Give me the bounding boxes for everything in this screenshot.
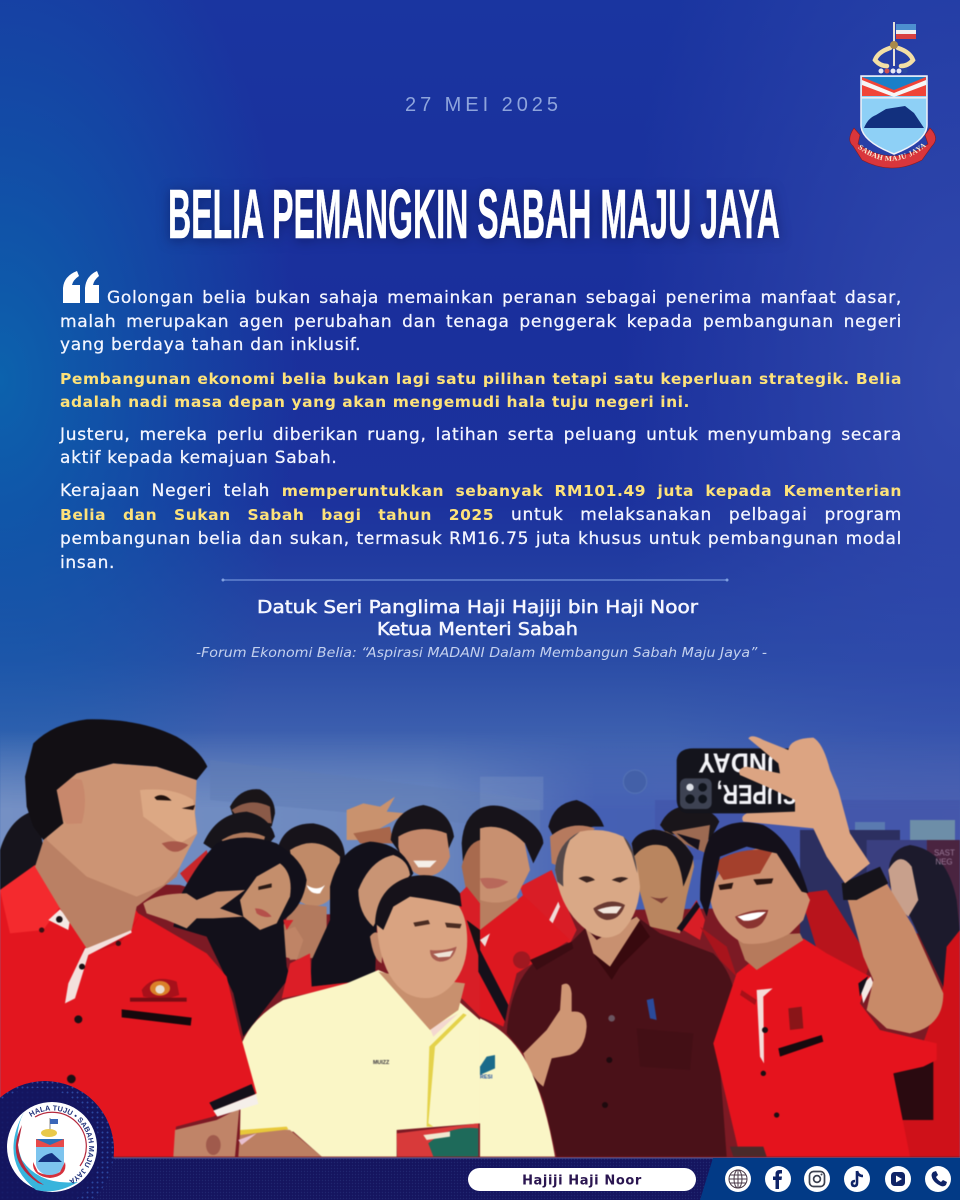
- thumb up hand: [523, 984, 587, 1087]
- book: [397, 1123, 478, 1157]
- selfie boy hair: [700, 822, 808, 917]
- arm: [173, 1108, 239, 1157]
- icon: facebook: [765, 1166, 791, 1192]
- crest on shirt: [142, 979, 179, 1000]
- back boy 1: [230, 789, 275, 827]
- old man face: [585, 917, 640, 967]
- icon: instagram: [804, 1166, 830, 1192]
- group photo: SUPER,: [717, 779, 797, 810]
- paragraph 2 highlighted: [60, 370, 902, 411]
- motto: SABAH MAJU JAYA: [858, 144, 926, 162]
- far left dark figure: [0, 810, 47, 890]
- selfie boy shirt: [713, 938, 937, 1157]
- paragraph 1: Golongan belia bukan sahaja memainkan peranan sebagai penerima manfaat dasar,: [107, 288, 902, 308]
- flag: [894, 22, 916, 66]
- event attribution: -Forum Ekonomi Belia: “Aspirasi MADANI Dalam Membangun Sabah Maju Jaya” -: [196, 646, 767, 661]
- badge crest: [33, 1118, 65, 1178]
- paragraph 2 highlighted: adalah nadi masa depan yang akan mengemudi hala tuju negeri ini.: [60, 393, 690, 411]
- footer bar: [0, 1158, 960, 1200]
- right edge boy: [462, 808, 480, 867]
- yellow shirt man: [240, 970, 480, 1157]
- group photo: NEG: [935, 858, 953, 867]
- speaker role: Ketua Menteri Sabah: [377, 620, 578, 640]
- back right sign and hijab: [927, 840, 960, 937]
- speaker name: Datuk Seri Panglima Haji Hajiji bin Haji Noor: [257, 598, 699, 618]
- back boy 2: [391, 805, 454, 853]
- strap: [467, 920, 480, 960]
- name pill: Hajiji Haji Noor: [522, 1174, 642, 1188]
- group photo: SUNDAY: [698, 747, 802, 778]
- paragraph 1: [60, 288, 902, 355]
- icon: quotation mark: [63, 271, 99, 303]
- name pill: [468, 1168, 696, 1191]
- group photo: MUIZZ: [373, 1060, 390, 1066]
- yellow shirt right part: [480, 1018, 555, 1157]
- badge ring text: HALA TUJU • SABAH MAJU JAYA: [28, 1105, 94, 1184]
- group photo: SAST: [934, 848, 955, 857]
- far right red: [897, 930, 960, 1157]
- paragraph 4: pembangunan belia dan sukan, termasuk RM16.75 juta khusus untuk pembangunan modal: [60, 529, 902, 549]
- red shirts behind: [282, 953, 370, 998]
- placket white: [65, 928, 132, 1003]
- fan on wall: [623, 770, 647, 793]
- icon: tiktok: [844, 1166, 870, 1192]
- red shirt boy left: [480, 895, 570, 1027]
- selfie boy arm: [845, 883, 943, 1033]
- paragraph 4: Belia dan Sukan Sabah bagi tahun 2025 untuk melaksanakan pelbagai program: [60, 505, 902, 525]
- back people left: [548, 800, 604, 837]
- black hijab girl: [173, 837, 307, 1037]
- cuff: [209, 1084, 255, 1111]
- date: 27 MEI 2025: [405, 94, 558, 116]
- paragraph 3: Justeru, mereka perlu diberikan ruang, latihan serta peluang untuk menyumbang secara: [60, 425, 902, 445]
- state crest logo: [849, 22, 936, 168]
- paragraph 1: yang berdaya tahan dan inklusif.: [60, 335, 361, 355]
- paragraph 4: insan.: [60, 553, 115, 573]
- paragraph 3: aktif kepada kemajuan Sabah.: [60, 448, 338, 468]
- selfie boy neck & face: [737, 933, 803, 970]
- wreath: [878, 68, 908, 74]
- paragraph 4: Kerajaan Negeri telah memperuntukkan sebanyak RM101.49 juta kepada Kementerian: [60, 481, 902, 501]
- person one hair: [25, 719, 207, 840]
- centre boy: [277, 823, 345, 867]
- icon: video: [885, 1166, 911, 1192]
- background shirt behind selfie boy: [800, 890, 870, 987]
- person one: shirt: [0, 865, 257, 1157]
- phone: [677, 748, 810, 813]
- hands crest: [875, 48, 913, 66]
- black hijab second: [310, 842, 413, 987]
- paragraph 4: [60, 481, 902, 573]
- shield: [861, 76, 927, 154]
- person one neck & face: [35, 820, 187, 948]
- group photo: RESI: [480, 1074, 493, 1080]
- badge logo: [0, 1081, 114, 1199]
- peace hand back: [347, 797, 407, 840]
- yellow man neck & face: [378, 972, 465, 1030]
- mountain: [864, 106, 924, 128]
- crowd backing: [0, 880, 960, 1158]
- group photo: [0, 718, 960, 1158]
- paragraph 2 highlighted: Pembangunan ekonomi belia bukan lagi satu pilihan tetapi satu keperluan strategik. Belia: [60, 370, 902, 388]
- icon: phone: [925, 1166, 951, 1192]
- ribbon: [850, 128, 936, 168]
- paragraph 1: malah merupakan agen perubahan dan tenaga penggerak kepada pembangunan negeri: [60, 312, 902, 332]
- maroon man shirt: [507, 917, 735, 1157]
- peace hand girl: [143, 890, 245, 928]
- hand: [739, 736, 870, 883]
- paragraph 3: [59, 425, 902, 468]
- divider line: [222, 578, 728, 582]
- quote body text: [59, 288, 902, 573]
- icon: website: [725, 1166, 751, 1192]
- old back boy with glasses: [660, 806, 719, 840]
- boy behind right of old man: [632, 831, 694, 933]
